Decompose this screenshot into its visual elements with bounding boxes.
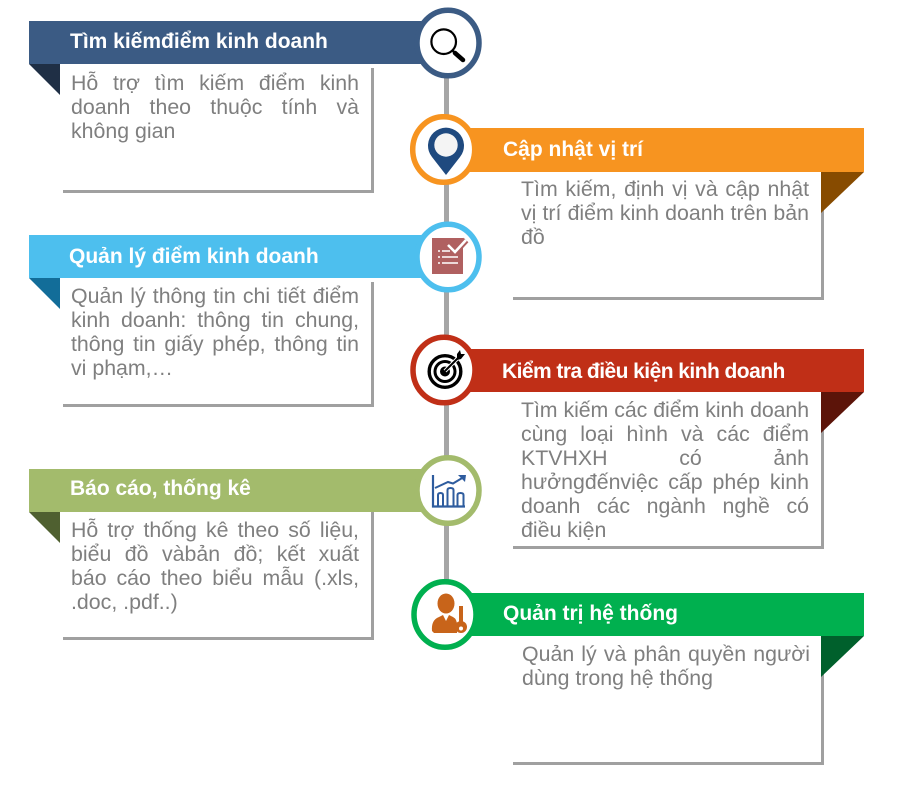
description — [71, 518, 359, 614]
description: báo cáo theo biểu mẫu (.xls, — [71, 566, 359, 590]
description: Hỗ trợ tìm kiếm điểm kinh — [71, 71, 359, 95]
description: Tìm kiếm các điểm kinh doanh — [521, 398, 809, 422]
heading bar: Tìm kiếmđiểm kinh doanh — [70, 30, 328, 53]
panel: cập nhật vị trí — [470, 128, 864, 300]
description: Hỗ trợ thống kê theo số liệu, — [71, 518, 359, 542]
heading bar — [29, 21, 429, 64]
heading bar: Kiểm tra điều kiện kinh doanh — [502, 360, 785, 383]
card frame — [513, 172, 824, 300]
description: thông tin giấy phép, thông tin — [71, 332, 359, 356]
description — [521, 177, 809, 249]
description: Quản lý thông tin chi tiết điểm — [71, 284, 359, 308]
icon: checklist circle — [420, 222, 482, 292]
icon: admin with key circle — [411, 579, 474, 650]
heading bar: Quản lý điểm kinh doanh — [69, 245, 319, 268]
description: biểu đồ vàbản đồ; kết xuất — [71, 542, 359, 566]
heading bar: Báo cáo, thống kê — [70, 477, 251, 500]
heading bar: Quản trị hệ thống — [503, 602, 678, 625]
fold — [821, 172, 864, 213]
icon: search circle — [420, 8, 482, 78]
card frame — [63, 282, 374, 407]
description: Tìm kiếm, định vị và cập nhật — [521, 177, 809, 201]
description: cùng loại hình và các điểm — [521, 422, 809, 446]
heading bar — [29, 235, 429, 278]
panel: báo cáo, thống kê — [29, 469, 421, 640]
icon: location pin circle — [410, 114, 472, 185]
fold — [821, 636, 864, 677]
heading bar — [444, 128, 864, 172]
description: Quản lý và phân quyền người — [522, 642, 810, 666]
description: .doc, .pdf..) — [71, 590, 178, 614]
description: điều kiện — [521, 518, 606, 542]
panel: quản trị hệ thống — [472, 593, 864, 765]
heading bar — [444, 349, 864, 392]
card frame — [63, 68, 374, 193]
fold — [29, 64, 60, 95]
description: vị trí điểm kinh doanh trên bản — [521, 201, 809, 225]
fold — [29, 278, 60, 309]
card frame — [513, 392, 824, 549]
panel: quản lý điểm kinh doanh — [29, 235, 422, 407]
description: doanh theo thuộc tính và — [71, 95, 359, 119]
description: KTVHXH có ảnh — [521, 446, 809, 470]
heading bar: Cập nhật vị trí — [503, 138, 643, 161]
card frame — [513, 636, 824, 765]
description: dùng trong hệ thống — [522, 666, 713, 690]
fold — [29, 512, 60, 543]
description — [522, 642, 810, 690]
description: kinh doanh: thông tin chung, — [71, 308, 359, 332]
card frame — [63, 512, 374, 640]
description — [521, 398, 809, 542]
icon: chart circle — [420, 455, 482, 526]
heading bar — [444, 593, 864, 636]
description: hưởngđếnviệc cấp phép kinh — [521, 470, 809, 494]
fold — [821, 392, 864, 433]
description: không gian — [71, 119, 175, 143]
description: vi phạm,… — [71, 356, 173, 380]
description: đồ — [521, 225, 545, 249]
panel: kiểm tra điều kiện kinh doanh — [470, 349, 864, 549]
icon: target circle — [410, 334, 472, 406]
timeline spine — [444, 60, 449, 585]
description — [71, 71, 359, 143]
heading bar — [29, 469, 429, 512]
description: doanh các ngành nghề có — [521, 494, 809, 518]
panel: tìm kiếm điểm kinh doanh — [29, 21, 422, 193]
description — [71, 284, 359, 380]
